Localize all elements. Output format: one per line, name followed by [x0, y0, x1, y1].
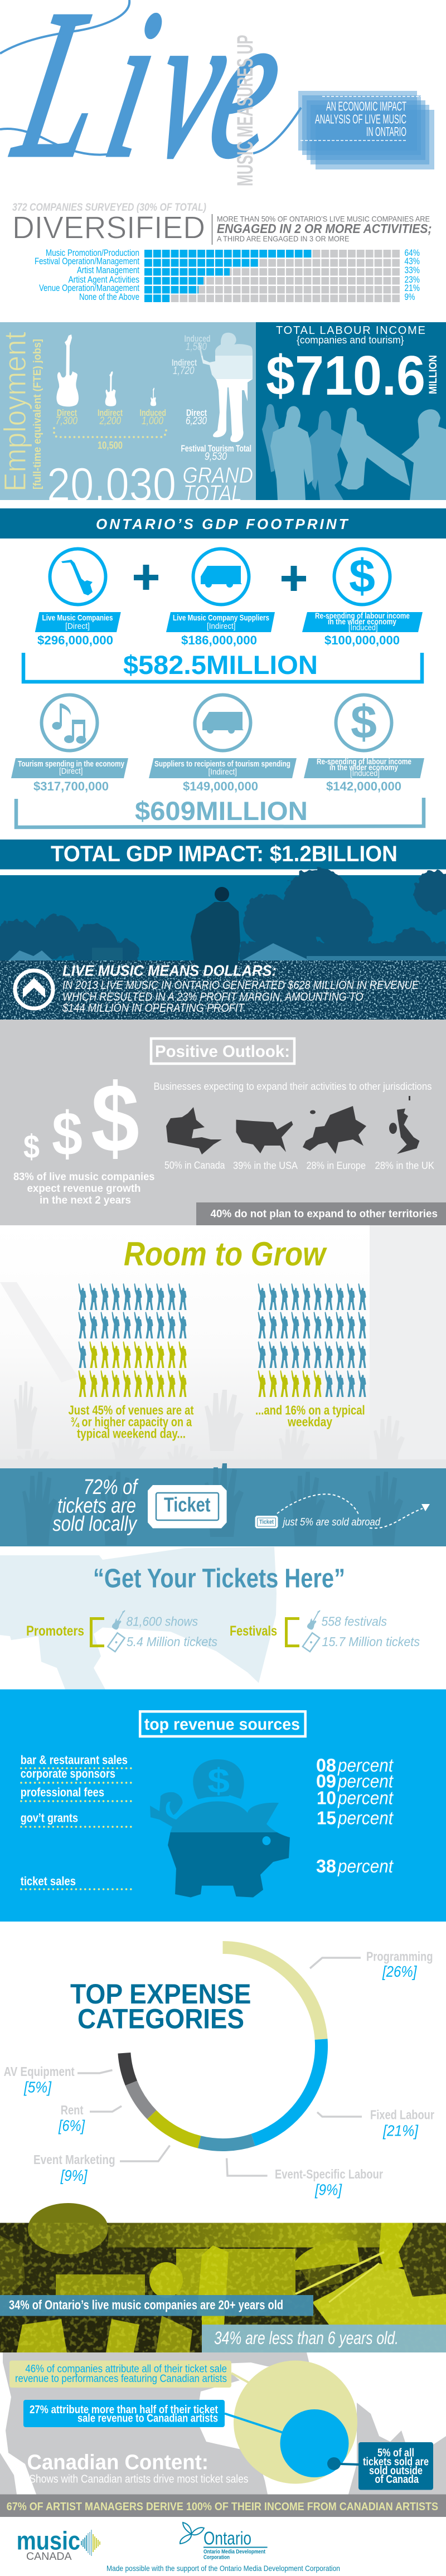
- bar: artist management 33%: 33%: [405, 265, 420, 275]
- text: festival tourism total: Festival Tourism Total: [181, 443, 251, 454]
- logo: ontario media development corporation: Ontario: [203, 2528, 251, 2548]
- text: direct 7,300: Direct: [57, 407, 77, 418]
- bar: none of the above 9%: 9%: [405, 292, 415, 302]
- map: usa: 39% in the USA: [233, 1160, 298, 1171]
- label: respending: [Induced]: [350, 769, 380, 778]
- chart: expense donut: [124, 1948, 322, 2145]
- label: tourism spending: [Direct]: [59, 767, 83, 776]
- panel: company age photo: [0, 2203, 446, 2352]
- text: induced 1,580: [184, 333, 211, 353]
- text: economic impact analysis: [300, 96, 421, 140]
- list: revenue source names: professional fees: [21, 1786, 104, 1799]
- chart: nested ellipses: [234, 2360, 357, 2484]
- list: revenue source names: corporate sponsors: [21, 1767, 115, 1781]
- map: europe: [303, 1106, 366, 1171]
- callout: 5% of tickets: sold outside: [369, 2465, 423, 2477]
- text: engaged in activities: [217, 214, 432, 243]
- text: 72% of tickets: 72% of: [84, 1476, 139, 1499]
- icon: ticket: [303, 1633, 319, 1652]
- callout: 5% of tickets: of Canada: [375, 2473, 419, 2486]
- banner: total gdp impact: TOTAL GDP IMPACT: $1.2BILLION: [51, 842, 397, 866]
- stat: $710.6 million: MILLION: [428, 355, 439, 394]
- text: engaged in activities: ENGAGED IN 2 OR MORE ACTIVITIES;: [217, 221, 432, 236]
- icon: growing dollars: $: [52, 1100, 83, 1168]
- text: weekend capacity: Just 45% of venues are at: [68, 1403, 194, 1417]
- bar: artist agent 23%: 23%: [405, 274, 420, 285]
- callout: less than 6 years old: [202, 2325, 446, 2352]
- photo: duotone band performers: [0, 2203, 446, 2352]
- label: respending: in the wider economy: [328, 617, 397, 627]
- text: weekend capacity: ¾ or higher capacity on a: [70, 1415, 192, 1429]
- icon: trillium: [180, 2522, 204, 2544]
- banner: artist managers: [0, 2494, 446, 2517]
- bar: festival operation 43%: Festival Operation/Management: [35, 256, 139, 266]
- icon: large guitar: [56, 334, 79, 406]
- heading: top expense categories: [70, 1978, 251, 2035]
- heading: top expense categories: TOP EXPENSE: [70, 1978, 251, 2010]
- values: row one: $100,000,000: [324, 633, 400, 647]
- text: revenue description: $144 MILLION IN OPERATING PROFIT: [62, 1002, 245, 1015]
- list: revenue percentages: 08: [316, 1755, 336, 1775]
- heading: diversified: DIVERSIFIED: [12, 210, 205, 245]
- text: direct 7,300: [56, 407, 77, 427]
- label: event-specific labour 9%: [9%]: [314, 2181, 342, 2198]
- bracket: dotted total 10,500: [54, 428, 166, 451]
- label: programming 26%: [26%]: [382, 1963, 418, 1980]
- callout: 5% of tickets: 5% of all: [377, 2447, 414, 2459]
- panel: tickets sold locally: [0, 1463, 446, 1546]
- map: uk: 28% in the UK: [375, 1160, 434, 1171]
- text: revenue growth: expect revenue growth: [27, 1183, 140, 1195]
- label: rent 6%: Rent: [61, 2103, 84, 2117]
- icon: piggy bank: $: [207, 1762, 230, 1801]
- icon: plus: [282, 566, 306, 591]
- label: live music companies: [35, 612, 121, 632]
- list: revenue percentages: percent: [337, 1808, 394, 1828]
- values: row one: [37, 633, 400, 647]
- text: indirect 1,720: Indirect: [172, 357, 197, 368]
- bracket and total: $582.5 million: $582.5MILLION: [123, 650, 318, 680]
- bar: venue operation 21%: Venue Operation/Management: [39, 283, 139, 293]
- group: promoters: 81,600 shows: [126, 1614, 198, 1629]
- group: promoters: Promoters: [26, 1623, 84, 1639]
- label: fixed labour 21%: [21%]: [382, 2122, 419, 2139]
- group: promoters: [26, 1608, 217, 1652]
- heading: get your tickets here: “Get Your Tickets Here”: [93, 1564, 345, 1593]
- icon: medium guitar: [105, 371, 116, 406]
- icon: dollar: $: [351, 696, 377, 748]
- list: revenue source names: bar & restaurant sales: [21, 1753, 128, 1767]
- label: respending: Re-spending of labour income: [315, 611, 410, 621]
- bar: artist agent 23%: [68, 274, 420, 285]
- group: festivals: 15.7 Million tickets: [322, 1634, 420, 1649]
- text: direct 6,230: Direct: [186, 407, 207, 418]
- icon: growing dollars: $: [23, 1128, 40, 1165]
- group: festivals: 558 festivals: [321, 1614, 387, 1629]
- bar: artist management 33%: Artist Management: [77, 265, 139, 275]
- callout: 20+ years old: 34% of Ontario’s live music companies are 20+ years old: [9, 2298, 283, 2312]
- label: rent 6%: [58, 2103, 122, 2134]
- text: induced 1,000: Induced: [139, 407, 166, 418]
- icon: plus: [134, 565, 158, 590]
- text: engaged in activities: MORE THAN 50% OF ONTARIO’S LIVE MUSIC COMPANIES ARE: [217, 214, 430, 223]
- callout: 20+ years old: [0, 2295, 313, 2316]
- group: promoters: 5.4 Million tickets: [127, 1634, 217, 1649]
- text: induced 1,000: 1,000: [142, 415, 163, 427]
- bracket and total: $609 million: [16, 796, 424, 827]
- list: revenue percentages: percent: [337, 1770, 394, 1792]
- text: revenue growth: [13, 1171, 155, 1206]
- panel: employment: [0, 322, 256, 511]
- list: revenue source names: ticket sales: [21, 1874, 76, 1888]
- text: 72% of tickets: tickets are: [57, 1494, 136, 1517]
- label: tourism spending: Tourism spending in the economy: [18, 759, 125, 769]
- footer: logos and credit: [17, 2522, 340, 2573]
- subheading: companies and tourism: {companies and tourism}: [297, 334, 404, 346]
- panel: canadian content: [0, 2352, 446, 2494]
- values: row one: $296,000,000: [37, 633, 113, 647]
- text: expansion intro: Businesses expecting to expand their activities to other jurisdictions: [154, 1081, 432, 1092]
- heading: top expense categories: CATEGORIES: [77, 2003, 244, 2035]
- icon: music notes: [41, 695, 97, 750]
- text: weekend capacity: [68, 1403, 194, 1441]
- panel: room to grow: [0, 1225, 446, 1474]
- text: revenue growth: 83% of live music companies: [13, 1171, 155, 1183]
- logo: ontario media development corporation: Corporation: [203, 2554, 230, 2561]
- text: companies surveyed: 372 COMPANIES SURVEYED (30% OF TOTAL): [12, 202, 206, 214]
- text: economic impact analysis: IN ONTARIO: [366, 124, 406, 139]
- heading: canadian content: Canadian Content:: [27, 2451, 209, 2475]
- heading: top revenue sources: top revenue sources: [144, 1715, 300, 1734]
- text: induced 1,580: Induced: [184, 333, 211, 344]
- pictogram: weekend venues: [78, 1283, 186, 1397]
- label: event-specific labour 9%: Event-Specific Labour: [275, 2167, 383, 2181]
- label: respending: in the wider economy: [329, 763, 399, 773]
- list: revenue source names: [21, 1753, 132, 1889]
- label: av equipment 5%: [5%]: [23, 2079, 52, 2096]
- illustration: workers silhouettes: [262, 404, 446, 500]
- label: respending: [Induced]: [348, 623, 378, 632]
- subheading: full-time equivalent jobs: [full-time equivalent (FTE) jobs]: [32, 339, 43, 489]
- map: canada: [164, 1107, 225, 1171]
- label: suppliers to recipients: Suppliers to recipients of tourism spending: [154, 759, 290, 769]
- values: row one: $186,000,000: [181, 633, 257, 647]
- text: canadian content subhead: Shows with Canadian artists drive most ticket sales: [29, 2473, 248, 2485]
- label: respending: [302, 611, 423, 632]
- icon: growing dollars: [23, 1064, 139, 1173]
- callout: no expansion: 40% do not plan to expand to other territories: [211, 1209, 438, 1220]
- label: av equipment 5%: [4, 2064, 112, 2096]
- icon: ticket: [108, 1633, 125, 1652]
- icon: small ticket: Ticket: [259, 1519, 274, 1525]
- bracket and total: $582.5 million: [23, 650, 422, 682]
- icon: up arrow circle: [15, 971, 53, 1008]
- text: grand total: TOTAL: [183, 481, 242, 506]
- icon: dollar: [336, 695, 391, 750]
- bracket and total: $609 million: $609MILLION: [135, 796, 308, 826]
- logo: music canada: CANADA: [26, 2551, 72, 2563]
- bar: artist agent 23%: Artist Agent Activities: [68, 274, 139, 285]
- heading: live music means dollars: LIVE MUSIC MEANS DOLLARS:: [62, 962, 277, 979]
- label: suppliers: Live Music Company Suppliers: [173, 613, 269, 623]
- map: usa: [233, 1120, 298, 1171]
- panel: stacked blue rectangles: [298, 91, 434, 169]
- text: sold abroad: just 5% are sold abroad: [282, 1516, 381, 1529]
- callout: 46% of companies: [9, 2360, 249, 2388]
- text: revenue growth: in the next 2 years: [40, 1195, 131, 1206]
- list: revenue percentages: percent: [337, 1787, 394, 1808]
- photo: trees and crowd: [0, 869, 446, 1020]
- icon: sound wave: [81, 2530, 100, 2556]
- background: concert photo wash: [0, 1225, 446, 1474]
- list: revenue percentages: percent: [337, 1755, 394, 1775]
- background: ontario shape: [0, 1547, 277, 1689]
- map: canada: 50% in Canada: [164, 1160, 225, 1171]
- section: tourism gdp row: [11, 695, 424, 827]
- text: indirect 2,200: Indirect: [98, 407, 123, 418]
- heading: room to grow: Room to Grow: [124, 1235, 327, 1273]
- stat: $710.6 million: $710.6: [266, 345, 425, 407]
- icon: small ticket: [255, 1516, 278, 1529]
- list: revenue percentages: percent: [337, 1856, 394, 1876]
- label: rent 6%: [6%]: [58, 2117, 85, 2134]
- callout: no expansion: [196, 1202, 446, 1225]
- label: event marketing 9%: [33, 2146, 170, 2184]
- pictogram: weekday venues: [258, 1283, 366, 1397]
- map: europe: 28% in Europe: [307, 1160, 366, 1171]
- label: event marketing 9%: [9%]: [60, 2167, 88, 2184]
- values: row two: $317,700,000: [33, 779, 109, 793]
- label: live music companies: [Direct]: [65, 622, 90, 631]
- logo: ontario media development corporation: Ontario Media Development: [203, 2549, 266, 2555]
- values: row two: $149,000,000: [183, 779, 258, 793]
- logo: ontario media development corporation: [180, 2522, 268, 2561]
- heading: total labour income: TOTAL LABOUR INCOME: [276, 324, 425, 337]
- label: live music companies: Live Music Companies: [42, 613, 113, 623]
- banner: ontario's gdp footprint: ONTARIO’S GDP FOOTPRINT: [96, 516, 349, 532]
- label: fixed labour 21%: [317, 2107, 434, 2139]
- icon: small guitar: [151, 388, 156, 406]
- group: festivals: Festivals: [230, 1623, 277, 1639]
- text: indirect 1,720: 1,720: [173, 365, 195, 377]
- values: row two: [33, 779, 401, 793]
- label: respending: [304, 757, 424, 778]
- section: diversified: [12, 202, 432, 302]
- callout: 46% of companies: revenue to performances featuring Canadian artists: [15, 2373, 227, 2385]
- text: festival tourism total: [181, 443, 251, 463]
- banner: total gdp impact: [0, 840, 446, 870]
- text: weekday capacity: [255, 1403, 365, 1429]
- arrow: dashed flight path: [277, 1494, 430, 1528]
- icon: saxophone: [50, 549, 106, 604]
- bar: festival operation 43%: [35, 256, 420, 266]
- callout: 27% attribute: [23, 2400, 283, 2433]
- label: programming 26%: [310, 1949, 433, 1980]
- icon: guitar: [111, 1608, 127, 1631]
- group: festivals: [230, 1608, 420, 1652]
- label: event marketing 9%: Event Marketing: [33, 2152, 115, 2167]
- bar: none of the above 9%: None of the Above: [79, 292, 139, 302]
- text: revenue description: WHICH RESULTED IN A 23% PROFIT MARGIN, AMOUNTING TO: [62, 991, 363, 1003]
- label: av equipment 5%: AV Equipment: [4, 2064, 75, 2079]
- text: direct 7,300: 7,300: [56, 415, 77, 427]
- map: uk: [375, 1096, 434, 1171]
- text: weekday capacity: ...and 16% on a typical: [255, 1403, 365, 1417]
- background: canada map: [0, 2352, 446, 2494]
- banner: ontario's gdp footprint: [0, 508, 446, 539]
- label: suppliers: [166, 612, 275, 632]
- bar: venue operation 21%: [39, 283, 420, 293]
- bar: festival operation 43%: 43%: [405, 256, 420, 266]
- text: grand total: 20,030: [47, 458, 176, 511]
- bar: artist management 33%: [77, 265, 420, 275]
- icon: piggy bank: [150, 1759, 290, 1898]
- text: induced 1,580: 1,580: [186, 341, 207, 353]
- label: suppliers to recipients: [149, 758, 297, 778]
- text: weekday capacity: weekday: [287, 1415, 332, 1429]
- list: revenue source names: gov’t grants: [21, 1811, 78, 1825]
- label: respending: Re-spending of labour income: [317, 757, 411, 767]
- bar: venue operation 21%: 21%: [405, 283, 420, 293]
- bar: music promotion 64%: Music Promotion/Production: [46, 248, 139, 258]
- callout: 5% of tickets: [340, 2442, 433, 2490]
- icon: dollar: $: [349, 550, 375, 602]
- icon: guitar: [306, 1608, 322, 1631]
- panel: get your tickets here: [0, 1547, 420, 1689]
- text: indirect 2,200: [98, 407, 123, 427]
- callout: 5% of tickets: tickets sold are: [363, 2456, 429, 2468]
- icon: growing dollars: $: [91, 1064, 139, 1173]
- list: revenue percentages: 15: [317, 1808, 336, 1828]
- list: revenue percentages: [316, 1755, 394, 1876]
- text: indirect 1,720: [172, 357, 197, 377]
- text: grand total: GRAND: [183, 463, 253, 488]
- panel: live music means dollars: [0, 869, 446, 1020]
- list: revenue percentages: 10: [317, 1787, 336, 1808]
- text: grand total: [49, 467, 253, 500]
- icon: truck: [193, 549, 249, 604]
- text: engaged in activities: A THIRD ARE ENGAGED IN 3 OR MORE: [217, 234, 349, 243]
- icon: truck: [195, 695, 251, 750]
- chart: activity bars: [35, 248, 420, 302]
- text: credit: Made possible with the support of the Ontario Media Development Corporation: [106, 2564, 340, 2573]
- bracket: dotted total 10,500: 10,500: [98, 440, 123, 451]
- heading: positive outlook: Positive Outlook:: [155, 1042, 290, 1061]
- text: revenue description: [62, 979, 419, 1015]
- values: row two: $142,000,000: [326, 779, 401, 793]
- list: revenue percentages: 38: [316, 1856, 336, 1876]
- icon: large ticket: Ticket: [164, 1493, 211, 1516]
- callout: 27% attribute: 27% attribute more than half of their ticket: [30, 2404, 218, 2416]
- text: indirect 2,200: 2,200: [99, 415, 121, 427]
- panel: positive outlook: [0, 1020, 446, 1225]
- bar: music promotion 64%: [46, 248, 420, 258]
- text: weekend capacity: typical weekend day...: [77, 1427, 186, 1441]
- icon: guitarist silhouette: [198, 333, 253, 442]
- label: suppliers: [Indirect]: [207, 622, 235, 631]
- text: direct 6,230: 6,230: [186, 415, 207, 427]
- icon: dollar: [334, 549, 390, 604]
- icon: large ticket: [148, 1485, 227, 1529]
- text: 72% of tickets: [52, 1476, 139, 1536]
- text: direct 6,230: [186, 407, 207, 427]
- text: 72% of tickets: sold locally: [52, 1512, 138, 1536]
- logo: music canada: music: [17, 2526, 80, 2555]
- callout: 46% of companies: 46% of companies attribute all of their ticket sale: [25, 2363, 227, 2375]
- bar: music promotion 64%: 64%: [405, 248, 420, 258]
- flourish: Live swashes: [0, 0, 301, 155]
- section: title: [0, 0, 434, 201]
- label: suppliers to recipients: [Indirect]: [209, 767, 237, 777]
- text: festival tourism total: 9,530: [205, 451, 227, 463]
- panel: total labour income: [256, 322, 446, 500]
- section: live music gdp row: [23, 549, 423, 682]
- list: revenue percentages: 09: [316, 1770, 336, 1792]
- text: induced 1,000: [139, 407, 166, 427]
- panel: top expense categories: [4, 1948, 434, 2198]
- label: event-specific labour 9%: [227, 2158, 383, 2198]
- panel: top revenue sources: [0, 1689, 446, 1922]
- label: tourism spending: [11, 758, 128, 778]
- callout: 27% attribute: sale revenue to Canadian artists: [77, 2413, 218, 2425]
- bar: none of the above 9%: [79, 292, 415, 302]
